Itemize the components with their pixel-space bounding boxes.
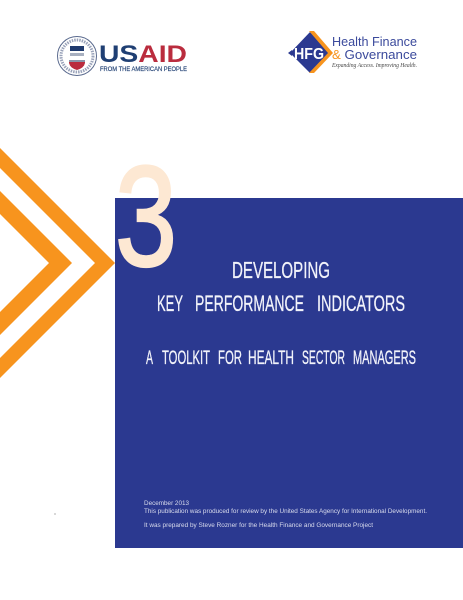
subtitle: MANAGERS xyxy=(353,348,416,369)
publication note: It was prepared by Steve Rozner for the Health Finance and Governance Project xyxy=(144,522,373,529)
subtitle: A xyxy=(146,348,153,369)
publication note xyxy=(144,500,427,529)
subtitle: HEALTH xyxy=(248,348,294,369)
USAID wordmark: USAID xyxy=(99,41,187,68)
logo: Health Finance and Governance xyxy=(288,31,417,73)
logo: USAID xyxy=(58,36,188,76)
publication note: December 2013 xyxy=(144,500,189,507)
publication note: This publication was produced for review by the United States Agency for International Development. xyxy=(144,508,427,515)
icon: orange double chevron arrow xyxy=(0,148,115,378)
title: developing key performance indicators xyxy=(157,257,405,316)
USAID tagline: FROM THE AMERICAN PEOPLE xyxy=(100,66,188,73)
icon: USAID seal xyxy=(58,36,96,76)
title: developing key performance indicators: KEY xyxy=(157,291,183,316)
icon: HFG diamond: HFG xyxy=(294,46,324,63)
subtitle: SECTOR xyxy=(302,348,345,369)
subtitle: TOOLKIT xyxy=(162,348,210,369)
tagline: Expanding Access. Improving Health. xyxy=(331,63,417,69)
large numeral 3: 3 xyxy=(115,138,177,296)
wordmark line 2: & Governance xyxy=(332,47,417,62)
panel: blue cover block xyxy=(115,198,463,548)
title: developing key performance indicators: INDICATORS xyxy=(317,291,405,316)
wordmark line 1: Health Finance xyxy=(332,34,417,49)
subtitle: FOR xyxy=(218,348,242,369)
stray dot xyxy=(54,513,56,515)
subtitle xyxy=(146,348,416,369)
title: developing key performance indicators: DEVELOPING xyxy=(232,257,330,283)
title: developing key performance indicators: PERFORMANCE xyxy=(195,291,304,316)
